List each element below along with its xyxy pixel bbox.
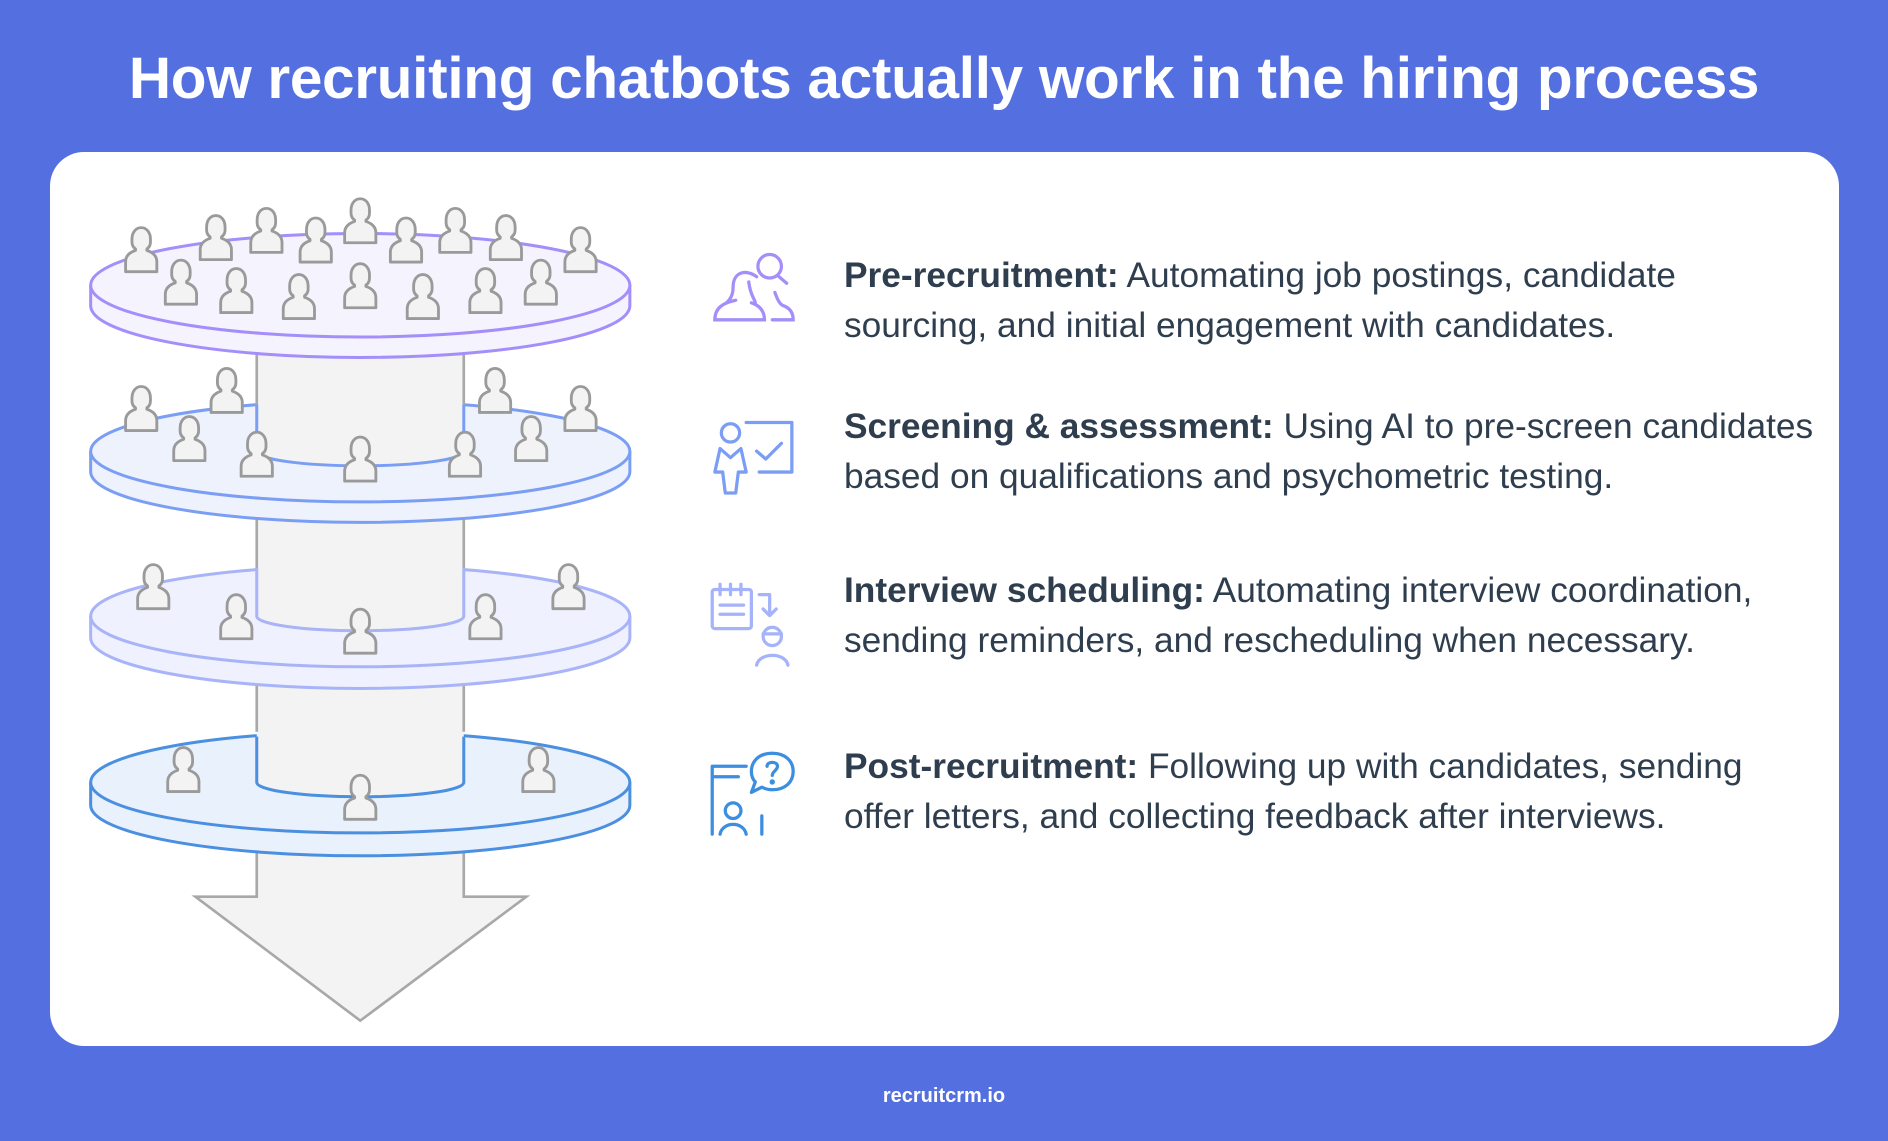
column segment 2-3 [257, 451, 464, 631]
disc 2 [91, 401, 630, 522]
text: post-recruitment: offer letters, and collecting feedback after interviews. [844, 797, 1665, 836]
disc 4 [91, 732, 630, 856]
title: How recruiting chatbots actually work in the hiring process [129, 46, 1759, 111]
people disc 1 [126, 199, 596, 319]
people disc 2 [126, 368, 596, 481]
text: post-recruitment: Post-recruitment: Following up with candidates, sending [844, 747, 1743, 786]
disc 3 [91, 566, 630, 688]
icon: screening [713, 420, 794, 495]
icon: post-recruitment [710, 752, 795, 836]
text: scheduling: sending reminders, and rescheduling when necessary. [844, 621, 1695, 660]
text: pre-recruitment [844, 256, 1676, 345]
text: pre-recruitment: Pre-recruitment: Automating job postings, candidate [844, 256, 1676, 295]
text: scheduling [844, 571, 1752, 660]
text: pre-recruitment: sourcing, and initial engagement with candidates. [844, 306, 1615, 345]
text: screening [844, 407, 1813, 496]
column segment 1-2 [257, 289, 464, 466]
text: post-recruitment [844, 747, 1743, 836]
icon: recruiter search [713, 252, 795, 322]
column segment 3-4 [257, 616, 464, 797]
text: screening: based on qualifications and psychometric testing. [844, 457, 1613, 496]
text: scheduling: Interview scheduling: Automating interview coordination, [844, 571, 1752, 610]
arrow [195, 782, 526, 1021]
text: screening: Screening & assessment: Using AI to pre-screen candidates [844, 407, 1813, 446]
disc 1 [91, 233, 630, 357]
panel: main white card [50, 152, 1839, 1046]
icon: scheduling [710, 582, 790, 667]
people disc 3 [138, 565, 584, 653]
footer: recruitcrm.io [883, 1085, 1005, 1107]
people disc 4 [168, 748, 554, 819]
